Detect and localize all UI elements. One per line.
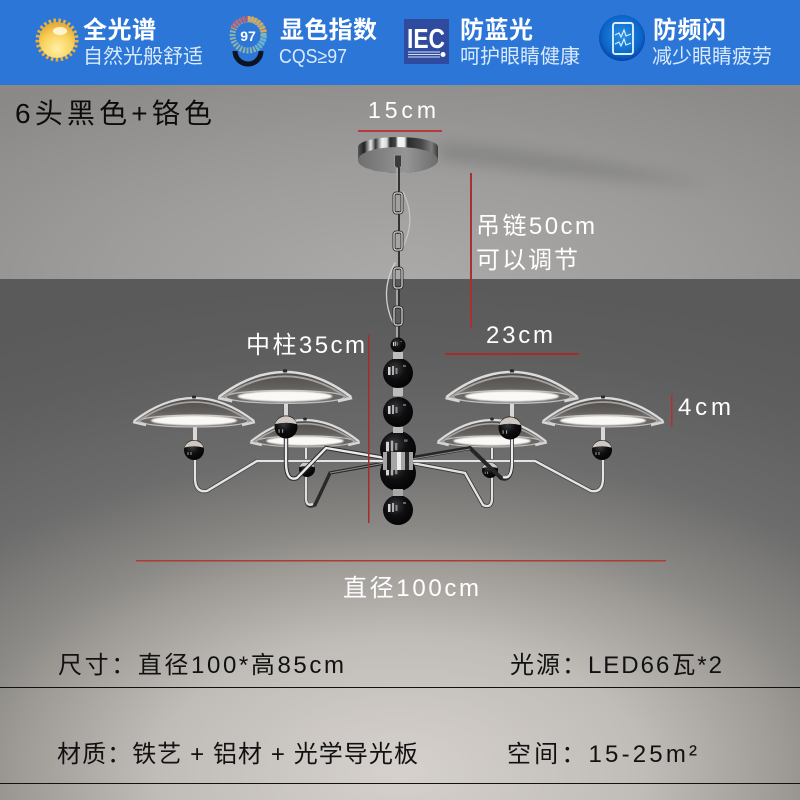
background: wall bbox=[0, 85, 800, 279]
dimension: chain length: 吊链50cm bbox=[476, 213, 595, 240]
feature: anti blue light bbox=[404, 17, 580, 68]
divider two bbox=[0, 783, 800, 784]
chandelier bbox=[133, 137, 664, 525]
heading: model and colour: 6头黑色+铬色 bbox=[15, 98, 212, 129]
lower left stem and arm bbox=[306, 447, 385, 506]
header bar bbox=[0, 0, 800, 85]
subtitle: eye care: 呵护眼睛健康 bbox=[460, 45, 580, 68]
dimension: overall diameter: 直径100cm bbox=[343, 575, 479, 602]
feature: anti flicker bbox=[599, 15, 772, 68]
subtitle: less fatigue: 减少眼睛疲劳 bbox=[652, 45, 772, 68]
dimension: shade height: 4cm bbox=[678, 394, 731, 421]
background: floor gradient bbox=[0, 279, 800, 800]
feature: full spectrum bbox=[38, 17, 203, 68]
ceiling canopy bbox=[358, 137, 438, 173]
lower right stem and arm bbox=[412, 447, 492, 506]
outer right arm bbox=[410, 427, 603, 491]
shade: outer right bbox=[542, 396, 664, 428]
specs: material: 材质：铁艺 + 铝材 + 光学导光板 bbox=[57, 741, 418, 768]
subtitle: natural light: 自然光般舒适 bbox=[83, 45, 203, 68]
specs: size: 尺寸：直径100*高85cm bbox=[58, 652, 344, 679]
canopy shadow on wall bbox=[438, 142, 710, 184]
title: full spectrum: 全光谱 bbox=[83, 17, 156, 44]
icon: IEC bbox=[404, 19, 449, 64]
arm ball: outer right bbox=[592, 440, 612, 460]
central column bbox=[380, 338, 416, 525]
dimension: canopy width: 15cm bbox=[368, 97, 436, 123]
outer and upper arms bbox=[195, 404, 603, 491]
shade: upper left bbox=[218, 369, 352, 404]
subtitle: CQS: CQS≥97 bbox=[279, 46, 347, 68]
hanging chain bbox=[386, 155, 410, 340]
title: anti blue: 防蓝光 bbox=[460, 17, 533, 44]
title: colour index: 显色指数 bbox=[280, 17, 377, 44]
outer left arm bbox=[195, 427, 388, 491]
specs: light source: 光源：LED66瓦*2 bbox=[510, 652, 722, 679]
shade: upper right bbox=[446, 369, 578, 404]
title: anti flicker: 防频闪 bbox=[653, 17, 726, 44]
icon: phone wave bbox=[599, 15, 645, 61]
icon: CQS 97 gauge bbox=[232, 19, 264, 64]
icon: sun bbox=[38, 20, 76, 60]
upper right arm bbox=[412, 404, 512, 479]
arm ball: upper left bbox=[274, 416, 298, 438]
rear lower arms and shades bbox=[250, 418, 547, 506]
shade: outer left bbox=[133, 396, 255, 428]
dimension: chain length bbox=[470, 173, 595, 328]
divider one bbox=[0, 687, 800, 688]
dimension: canopy width bbox=[358, 97, 442, 132]
rear ball left bbox=[299, 461, 315, 477]
dimension: arm span bbox=[445, 322, 579, 355]
arm ball: upper right bbox=[498, 416, 522, 440]
lower left shade bbox=[250, 418, 360, 448]
dimension: column height: 中柱35cm bbox=[246, 332, 365, 359]
dimension: chain length: 可以调节 bbox=[476, 247, 578, 274]
upper left arm bbox=[286, 404, 385, 479]
icon: IEC: IEC bbox=[407, 23, 445, 54]
rear ball right bbox=[482, 462, 498, 478]
feature: colour rendering bbox=[232, 17, 377, 68]
icon: CQS 97 gauge: 97 bbox=[240, 28, 256, 44]
dimension: arm span: 23cm bbox=[486, 322, 553, 349]
arm ball: outer left bbox=[184, 440, 204, 460]
stems above balls bbox=[195, 404, 603, 445]
specs: space: 空间：15-25m² bbox=[507, 741, 697, 768]
lower right shade bbox=[437, 418, 547, 448]
